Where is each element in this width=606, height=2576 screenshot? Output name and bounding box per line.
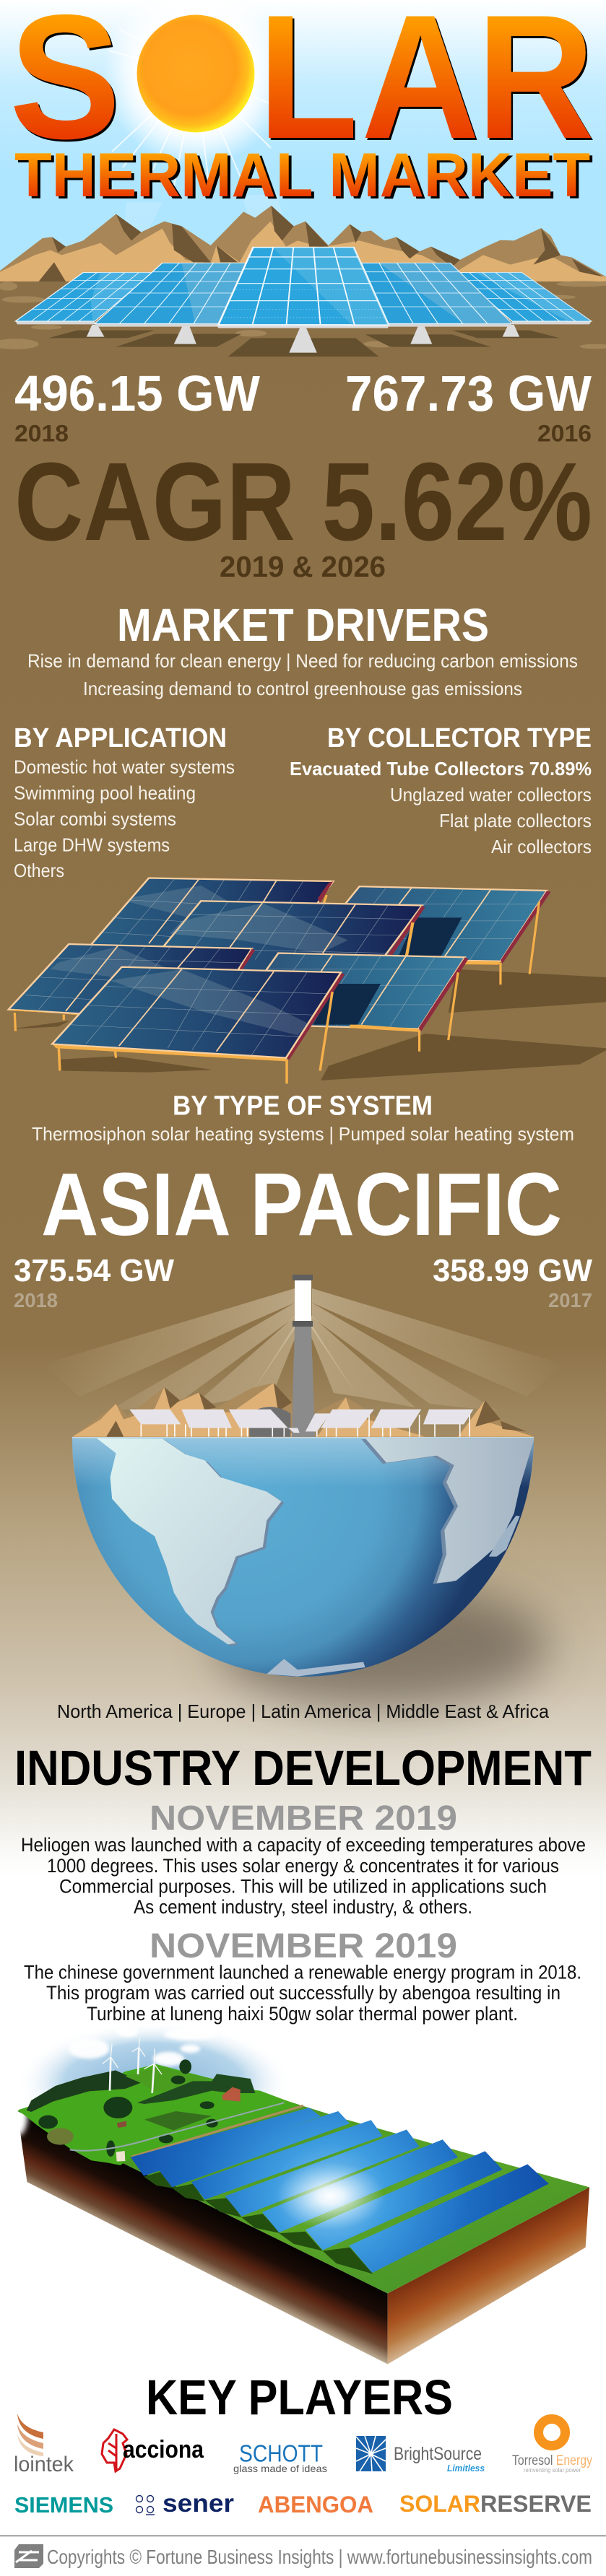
panel: center [128, 901, 425, 990]
logo: lointek [14, 2414, 74, 2476]
list: by collector type [290, 723, 592, 857]
logo: solarreserve: RESERVE [480, 2491, 592, 2517]
logo: lointek: lointek [14, 2453, 74, 2476]
logo: schott [233, 2440, 327, 2474]
logo: torresol energy [512, 2419, 592, 2474]
section: market drivers: Increasing demand to control greenhouse gas emissions [83, 678, 522, 699]
panel: hero sky [0, 0, 606, 283]
logo: torresol energy: reinventing solar power [524, 2467, 581, 2474]
illustration: tower head [293, 1275, 313, 1357]
stat: 375.54 GW 2018: 375.54 GW [14, 1253, 174, 1288]
logo: abengoa: ABENGOA [258, 2492, 373, 2518]
list: by application: Solar combi systems [14, 808, 176, 830]
mirrors [129, 1410, 473, 1437]
stat: 496.15 GW 2018: 2018 [14, 420, 69, 446]
panel supports [87, 325, 519, 353]
list: by application: Large DHW systems [14, 834, 170, 856]
continent: South America [97, 1438, 284, 1646]
list: by collector type: Flat plate collectors [439, 810, 592, 831]
panel: front right [228, 953, 469, 1052]
stat: 767.73 GW 2016: 767.73 GW [345, 365, 592, 422]
section: by type of system [32, 1091, 574, 1145]
logo: solarreserve [399, 2491, 592, 2517]
logo: brightsource: BrightSource [394, 2444, 482, 2464]
panel: back left [75, 878, 333, 969]
text block: november 2019 first: Commercial purposes. This will be utilized in applications such [59, 1875, 547, 1897]
illustration: mountains and solar array [0, 206, 606, 377]
title: THERMAL MARKET: THERMAL MARKET [14, 141, 590, 210]
wind turbines [103, 2038, 162, 2093]
ground band [0, 280, 606, 377]
logo: brightsource [356, 2436, 485, 2474]
hill scene backdrop [17, 2022, 291, 2142]
sun flare [277, 2162, 384, 2230]
section: market drivers: MARKET DRIVERS [117, 599, 489, 651]
solar panels [15, 248, 592, 328]
list: by application: Others [14, 860, 64, 881]
mountains [0, 206, 606, 281]
list: by collector type: Unglazed water collectors [390, 784, 592, 805]
continent: Antarctica [267, 1659, 365, 1677]
panel: front left back [9, 944, 255, 1031]
grass top [17, 2071, 589, 2293]
title: SOLAR [9, 0, 594, 175]
heading: key players: KEY PLAYERS [146, 2370, 453, 2425]
panel: back right [301, 886, 551, 984]
ground patches [0, 281, 606, 349]
text block: november 2019 second: Turbine at luneng haixi 50gw solar thermal power plant. [87, 2003, 518, 2025]
section: by type of system: Thermosiphon solar heating systems | Pumped solar heating system [32, 1123, 574, 1145]
solar rows [131, 2108, 549, 2273]
row shadows [144, 2171, 373, 2274]
illustration: tower mountains and mirrors [72, 1357, 534, 1437]
illustration: half globe [72, 1437, 534, 1677]
list: by collector type: Air collectors [491, 836, 592, 857]
stat: 358.99 GW 2017: 358.99 GW [433, 1253, 592, 1288]
sky dome [17, 2022, 291, 2142]
logo: acciona [102, 2429, 204, 2471]
section: market drivers [27, 599, 578, 699]
illustration: solar panel array [9, 878, 606, 1083]
logo: solarreserve: SOLAR [399, 2491, 480, 2517]
text block: november 2019 first [21, 1799, 586, 1918]
logo: siemens: SIEMENS [14, 2492, 113, 2518]
illustration: solar farm block [7, 2022, 589, 2365]
stat: 375.54 GW 2018: 2018 [14, 1289, 58, 1311]
section: by type of system: BY TYPE OF SYSTEM [173, 1091, 433, 1122]
list: by application: Domestic hot water systems [14, 756, 235, 778]
text block: november 2019 first: NOVEMBER 2019 [150, 1799, 457, 1838]
stat: 375.54 GW 2018 [14, 1253, 174, 1311]
text block: november 2019 second [24, 1927, 581, 2025]
stat: 358.99 GW 2017 [433, 1253, 592, 1311]
soil right side [388, 2187, 589, 2365]
text block: november 2019 second: NOVEMBER 2019 [150, 1927, 457, 1965]
logo: schott: glass made of ideas [233, 2463, 327, 2474]
text: regions: North America | Europe | Latin America | Middle East & Africa [57, 1700, 550, 1722]
list: by application: BY APPLICATION [14, 723, 227, 754]
logo: torresol energy: Torresol Energy [512, 2453, 592, 2468]
tower shaft [292, 1357, 315, 1437]
list: by collector type: Evacuated Tube Collectors 70.89% [290, 758, 592, 780]
stat: CAGR: 2019 & 2026 [220, 550, 386, 583]
text block: november 2019 first: As cement industry, steel industry, & others. [134, 1896, 472, 1918]
grey building [249, 1407, 290, 1437]
list: by application [14, 723, 235, 881]
text block: november 2019 second: This program was carried out successfully by abengoa resulting in [46, 1982, 560, 2004]
mountains [72, 1383, 534, 1437]
hill details [18, 2038, 303, 2165]
illustration: solar rays [43, 1288, 563, 1411]
list: by application: Swimming pool heating [14, 782, 196, 804]
stat: 358.99 GW 2017: 2017 [548, 1289, 592, 1311]
section: market drivers: Rise in demand for clean energy | Need for reducing carbon emissions [27, 650, 578, 671]
continent: Africa [361, 1438, 534, 1584]
logo: sener [136, 2489, 234, 2518]
panel shadows [48, 331, 560, 357]
stat: 496.15 GW 2018: 496.15 GW [14, 365, 260, 422]
logo: brightsource: Limitless [447, 2463, 485, 2474]
corner fade [7, 2097, 27, 2136]
stat: 767.73 GW 2016 [345, 365, 592, 446]
logo: sener: sener [163, 2489, 234, 2518]
soil left side [17, 2111, 388, 2365]
logo: acciona: acciona [123, 2436, 204, 2463]
illustration: shadow of globe [217, 1584, 549, 1707]
stat: 496.15 GW 2018 [14, 365, 260, 446]
icon: sun with rays [103, 0, 288, 245]
clouds [69, 2027, 217, 2066]
panel: front [52, 967, 345, 1083]
ground shadows [12, 969, 606, 1080]
logo: schott: SCHOTT [239, 2440, 323, 2467]
stat: 767.73 GW 2016: 2016 [537, 420, 592, 446]
text block: november 2019 first: 1000 degrees. This uses solar energy & concentrates it for various [47, 1855, 559, 1877]
